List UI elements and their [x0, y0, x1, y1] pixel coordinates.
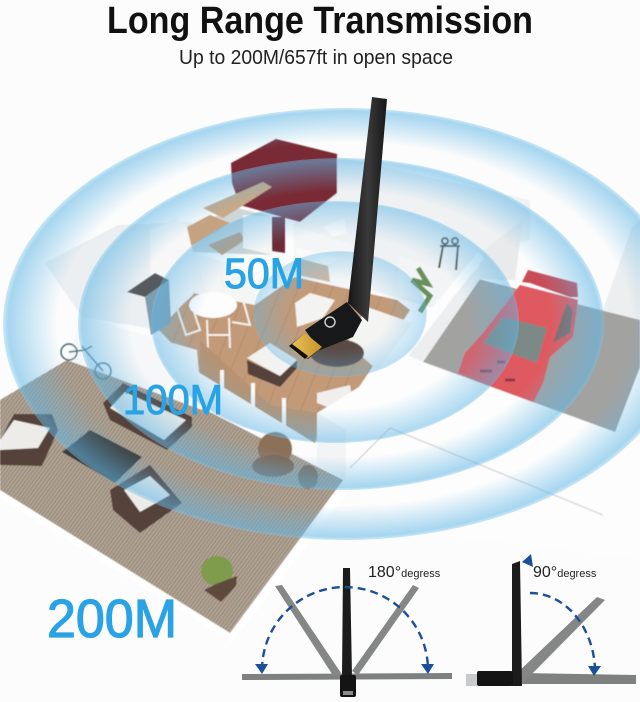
left front wall	[67, 317, 202, 410]
car side window	[553, 303, 573, 343]
label 90: 90°degress	[533, 564, 597, 581]
garage floor	[423, 279, 640, 432]
signal rings	[3, 108, 640, 540]
dashed arc	[262, 587, 428, 670]
title: Long Range Transmission	[107, 0, 533, 42]
fridge	[150, 218, 193, 325]
front white block	[317, 352, 640, 560]
front armchair	[247, 343, 297, 387]
stair side wall	[243, 215, 272, 255]
car grille	[480, 362, 515, 380]
usb slot	[343, 691, 353, 695]
wooden floor	[159, 277, 410, 443]
sofa cushion	[110, 392, 186, 440]
upper rooms	[293, 157, 530, 310]
patio table	[62, 430, 142, 483]
potted plant	[201, 556, 237, 602]
label: 200M: 200M	[47, 589, 177, 649]
small sofa	[317, 385, 352, 408]
staircase back	[187, 208, 272, 255]
armchair	[295, 293, 335, 327]
partition wall side	[400, 265, 480, 362]
label: 50M: 50M	[224, 250, 304, 298]
stool upper	[258, 432, 292, 466]
subtitle: Up to 200M/657ft in open space	[179, 47, 453, 69]
garage right wall	[603, 220, 640, 320]
dashed arc	[530, 593, 595, 668]
usb plug	[291, 333, 322, 358]
bicycle	[61, 344, 111, 379]
logo	[325, 317, 335, 327]
car spoiler	[522, 270, 578, 297]
block front face	[317, 413, 346, 480]
oven	[145, 280, 171, 335]
arrow up	[522, 554, 533, 567]
sofa frame	[103, 383, 192, 450]
chair frame	[0, 414, 58, 466]
arrow left	[255, 664, 268, 674]
shelf stand	[439, 238, 460, 270]
usb plug side	[289, 333, 322, 359]
patio armchair left	[0, 414, 58, 466]
house illustration	[0, 139, 640, 642]
rug	[310, 339, 364, 367]
patio armchair bottom	[110, 465, 182, 533]
ring: 200M	[3, 108, 640, 540]
back wall right	[293, 225, 353, 290]
bathtub	[323, 218, 347, 237]
kitchen partition	[193, 252, 255, 305]
interior wall right	[397, 255, 453, 305]
adapter side	[477, 671, 513, 686]
columns	[222, 370, 284, 433]
left tilted antenna	[275, 585, 341, 677]
counter	[295, 247, 338, 266]
antenna	[348, 97, 387, 322]
right tilted antenna	[352, 585, 419, 675]
partition wall top	[395, 252, 484, 360]
usb opening	[289, 344, 308, 359]
chair cushion	[124, 476, 170, 512]
maroon pillar	[272, 217, 285, 253]
garage side wall back	[478, 220, 523, 280]
ring: 100M	[151, 201, 519, 443]
upright antenna	[512, 561, 522, 686]
plant pot	[204, 576, 237, 602]
usb plug side	[466, 674, 477, 686]
patio sofa top	[103, 383, 192, 450]
label: 100M: 100M	[123, 376, 223, 423]
armchair base	[247, 360, 297, 387]
upright antenna	[342, 568, 352, 677]
white sofa	[347, 307, 413, 370]
horizontal antenna positions	[242, 673, 452, 680]
stool lower	[252, 455, 294, 477]
ring: mid	[78, 158, 604, 490]
chair cushion	[0, 420, 50, 450]
maroon room	[231, 139, 337, 222]
left back wall	[45, 222, 193, 330]
ring: 50M	[253, 251, 427, 377]
dining chairs	[176, 275, 250, 350]
patio floor	[0, 360, 343, 633]
arrow down	[588, 666, 601, 676]
adapter body	[305, 302, 362, 350]
chair frame	[110, 465, 182, 533]
patio rim	[0, 480, 354, 642]
armchair seat	[247, 343, 297, 376]
ground line	[350, 428, 603, 515]
stacked stools	[252, 432, 294, 477]
small stool	[298, 465, 318, 489]
counter unit	[298, 258, 330, 282]
dining table	[189, 292, 237, 318]
stair tread top	[203, 182, 272, 218]
wooden front floor	[200, 340, 317, 443]
plant in room	[412, 268, 430, 312]
horizontal antenna	[522, 673, 636, 684]
label 180: 180°degress	[368, 564, 441, 581]
diagram: 90 degree rotation	[466, 554, 636, 686]
car	[458, 270, 578, 403]
car windshield	[483, 317, 547, 363]
diagram: 180 degree rotation	[242, 564, 452, 697]
usb wifi adapter	[289, 97, 387, 359]
tilted antenna	[516, 597, 605, 684]
stair tread bottom	[208, 232, 245, 255]
plant leaves	[201, 556, 233, 586]
car body	[458, 285, 578, 403]
stair tread lower	[187, 215, 230, 247]
stove	[127, 273, 169, 297]
arrow right	[421, 664, 434, 674]
adapter front	[340, 675, 356, 697]
